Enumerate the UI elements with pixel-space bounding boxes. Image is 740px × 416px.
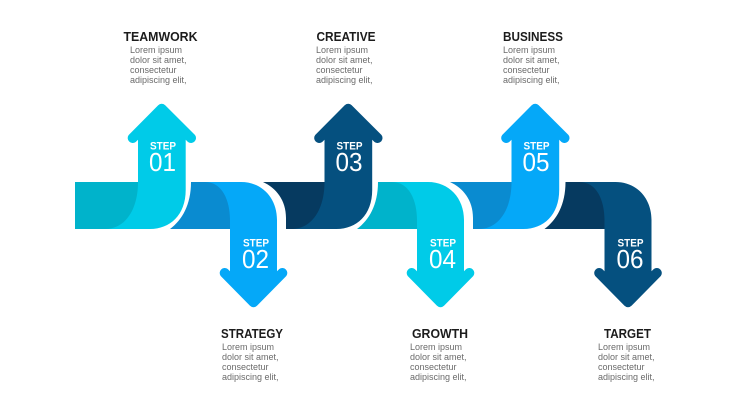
text block: teamwork: consectetur [130,65,177,75]
step 6 down arrow [544,182,662,307]
text block: growth: dolor sit amet, [410,352,467,362]
step 1 up arrow: STEP [150,140,176,152]
step 4 down arrow: STEP [430,238,456,250]
step 5 up arrow [450,104,570,229]
text block: creative: adipiscing elit, [316,75,373,85]
text block: strategy: consectetur [222,362,269,372]
step 1 up arrow: 01 [149,147,176,177]
text block: creative: dolor sit amet, [316,55,373,65]
text block: creative: consectetur [316,65,363,75]
text block: target: adipiscing elit, [598,372,655,382]
text block: creative: CREATIVE [316,29,376,44]
text block: growth: consectetur [410,362,457,372]
text block: creative: Lorem ipsum [316,45,368,55]
step 2 down arrow: 02 [242,244,269,274]
text block: teamwork [124,29,198,85]
text block: teamwork: adipiscing elit, [130,75,187,85]
text block: target: Lorem ipsum [598,342,650,352]
text block: target: dolor sit amet, [598,352,655,362]
text block: strategy: STRATEGY [221,326,283,341]
text block: business: adipiscing elit, [503,75,560,85]
text block: business: BUSINESS [503,29,563,44]
text block: target [598,326,655,382]
text block: growth: Lorem ipsum [410,342,462,352]
text block: teamwork: dolor sit amet, [130,55,187,65]
step 6 down arrow: 06 [616,244,644,274]
step 6 down arrow: STEP [618,238,644,250]
text block: business [503,29,563,85]
text block: business: dolor sit amet, [503,55,560,65]
step 5 up arrow: STEP [524,140,550,152]
step 4 down arrow [357,182,474,307]
text block: teamwork: TEAMWORK [124,29,198,44]
step 2 down arrow [170,182,287,307]
text block: growth: adipiscing elit, [410,372,467,382]
text block: business: consectetur [503,65,550,75]
step 3 up arrow: 03 [336,147,362,177]
text block: business: Lorem ipsum [503,45,555,55]
step 4 down arrow: 04 [429,244,456,274]
step 2 down arrow: STEP [243,238,269,250]
step 1 up arrow [75,104,196,229]
text block: creative [316,29,376,85]
text block: target: TARGET [604,326,651,341]
text block: strategy: adipiscing elit, [222,372,279,382]
step 5 up arrow: 05 [522,147,550,177]
step 3 up arrow: STEP [336,140,362,152]
text block: target: consectetur [598,362,645,372]
text block: teamwork: Lorem ipsum [130,45,182,55]
text block: strategy: Lorem ipsum [222,342,274,352]
text block: strategy [221,326,283,382]
text block: strategy: dolor sit amet, [222,352,279,362]
text block: growth [410,326,468,382]
text block: growth: GROWTH [412,326,468,341]
step 3 up arrow [263,104,382,229]
